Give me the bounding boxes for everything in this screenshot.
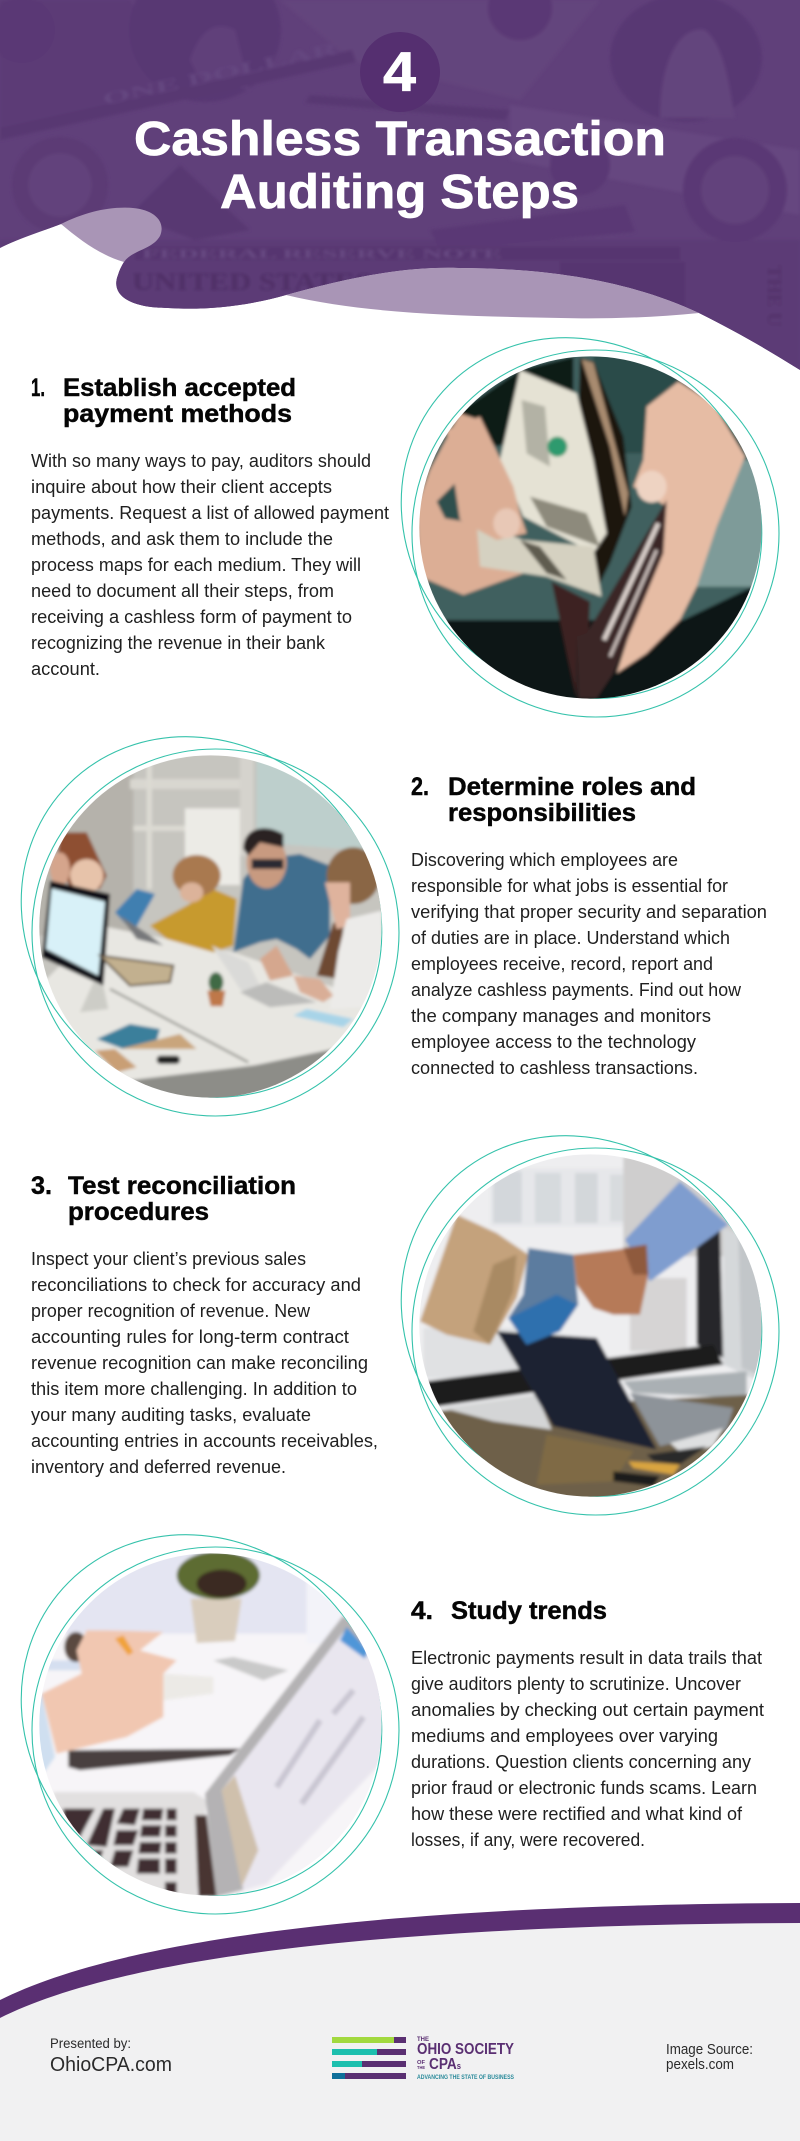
step 4 text: durations. Question clients concerning any	[411, 1752, 751, 1772]
step 4 heading: 4.	[411, 1597, 433, 1625]
step 3 text: your many auditing tasks, evaluate	[31, 1405, 311, 1425]
step 2 text: the company manages and monitors	[411, 1006, 711, 1026]
step 1 text: process maps for each medium. They will	[31, 555, 361, 575]
presented by: Presented by:	[50, 2036, 131, 2051]
step 3 text: proper recognition of revenue. New	[31, 1301, 311, 1321]
title	[134, 40, 666, 219]
step 4 text: give auditors plenty to scrutinize. Uncover	[411, 1674, 741, 1694]
step 4 text: mediums and employees over varying	[411, 1726, 718, 1746]
step 4 heading: Study trends	[451, 1597, 607, 1625]
step 1 text: methods, and ask them to include the	[31, 529, 333, 549]
presented by	[50, 2036, 172, 2076]
header lavender wave bottom	[286, 268, 699, 318]
photo 2 rings	[0, 662, 456, 1172]
step 3 heading: procedures	[68, 1198, 209, 1226]
title: 4	[383, 40, 416, 103]
photo 1 rings	[327, 263, 800, 773]
step 1 text: inquire about how their client accepts	[31, 477, 332, 497]
step 4 text: Electronic payments result in data trails that	[411, 1648, 762, 1668]
step 1 text: payments. Request a list of allowed payment	[31, 503, 389, 523]
step 3 text: accounting entries in accounts receivables,	[31, 1431, 378, 1451]
photo 1: hands opening wallet	[413, 350, 767, 703]
step 3 text: inventory and deferred revenue.	[31, 1457, 286, 1477]
photo 4 rings	[0, 1460, 456, 1970]
photo 2: team at office desks	[33, 749, 387, 1102]
step 2 heading: responsibilities	[448, 799, 636, 827]
step 3 text: this item more challenging. In addition to	[31, 1379, 357, 1399]
title number circle	[360, 32, 440, 112]
step 3 text: accounting rules for long-term contract	[31, 1327, 349, 1347]
header lavender wave left	[61, 208, 162, 262]
step 2 text: of duties are in place. Understand which	[411, 928, 730, 948]
step 4 text: losses, if any, were recovered.	[411, 1830, 645, 1850]
logo: Ohio Society of CPAs: OHIO SOCIETY	[417, 2041, 514, 2058]
step 2 text: employees receive, record, report and	[411, 954, 713, 974]
step 4 text: prior fraud or electronic funds scams. Learn	[411, 1778, 757, 1798]
header banner with banknote texture	[0, 0, 800, 375]
step 1 text: recognizing the revenue in their bank	[31, 633, 326, 653]
step 2 text: verifying that proper security and separation	[411, 902, 767, 922]
step 4 text: how these were rectified and what kind of	[411, 1804, 743, 1824]
footer grey panel	[0, 1923, 800, 2141]
logo: Ohio Society of CPAs: CPAs	[429, 2056, 461, 2073]
step 1 heading: 1.	[31, 374, 45, 402]
step 2 text: responsible for what jobs is essential for	[411, 876, 728, 896]
header banner with banknote texture: THE U	[763, 265, 785, 327]
photo 3 rings	[327, 1061, 800, 1571]
step 1 text: account.	[31, 659, 100, 679]
step 1 heading: Establish accepted	[63, 374, 296, 402]
step 2 heading: 2.	[411, 773, 429, 801]
logo: Ohio Society of CPAs: THE	[417, 2065, 425, 2070]
step 2 heading	[411, 773, 696, 827]
step 2 text: employee access to the technology	[411, 1032, 696, 1052]
step 3 heading: 3.	[31, 1172, 52, 1200]
step 1 text: receiving a cashless form of payment to	[31, 607, 352, 627]
title: Cashless Transaction	[134, 113, 666, 166]
step 2 text: Discovering which employees are	[411, 850, 678, 870]
step 3 text	[31, 1249, 378, 1477]
step 1 heading: payment methods	[63, 400, 292, 428]
step 2 text	[411, 850, 767, 1078]
step 2 text: analyze cashless payments. Find out how	[411, 980, 742, 1000]
step 1 text	[31, 451, 389, 679]
step 2 text: connected to cashless transactions.	[411, 1058, 698, 1078]
step 3 heading: Test reconciliation	[68, 1172, 296, 1200]
logo: Ohio Society of CPAs: OF	[417, 2060, 426, 2066]
step 1 heading	[31, 374, 296, 428]
step 1 text: With so many ways to pay, auditors should	[31, 451, 371, 471]
header banner with banknote texture: FEDERAL RESERVE NOTE	[142, 246, 502, 261]
photo 3: handshake over laptop	[413, 1148, 767, 1501]
header banner with banknote texture: UNITED STATES	[132, 269, 372, 296]
logo: Ohio Society of CPAs: ADVANCING THE STATE OF BUSINESS	[417, 2075, 514, 2081]
title: Auditing Steps	[220, 166, 579, 219]
step 2 heading: Determine roles and	[448, 773, 696, 801]
image source: pexels.com	[666, 2057, 734, 2073]
step 1 text: need to document all their steps, from	[31, 581, 334, 601]
logo: Ohio Society of CPAs	[332, 2036, 514, 2081]
footer purple swoosh	[0, 1903, 800, 2018]
step 3 text: reconciliations to check for accuracy and	[31, 1275, 361, 1295]
photo 4: hand and notebook beside laptop	[33, 1547, 387, 1900]
image source	[666, 2042, 753, 2073]
presented by: OhioCPA.com	[50, 2054, 172, 2076]
step 3 text: revenue recognition can make reconciling	[31, 1353, 368, 1373]
logo: Ohio Society of CPAs: THE	[417, 2036, 430, 2043]
step 4 text	[411, 1648, 764, 1850]
step 3 heading	[31, 1172, 296, 1226]
header banner with banknote texture: ONE DOLLAR	[101, 38, 341, 109]
step 3 text: Inspect your client’s previous sales	[31, 1249, 306, 1269]
step 4 text: anomalies by checking out certain payment	[411, 1700, 764, 1720]
image source: Image Source:	[666, 2042, 753, 2058]
